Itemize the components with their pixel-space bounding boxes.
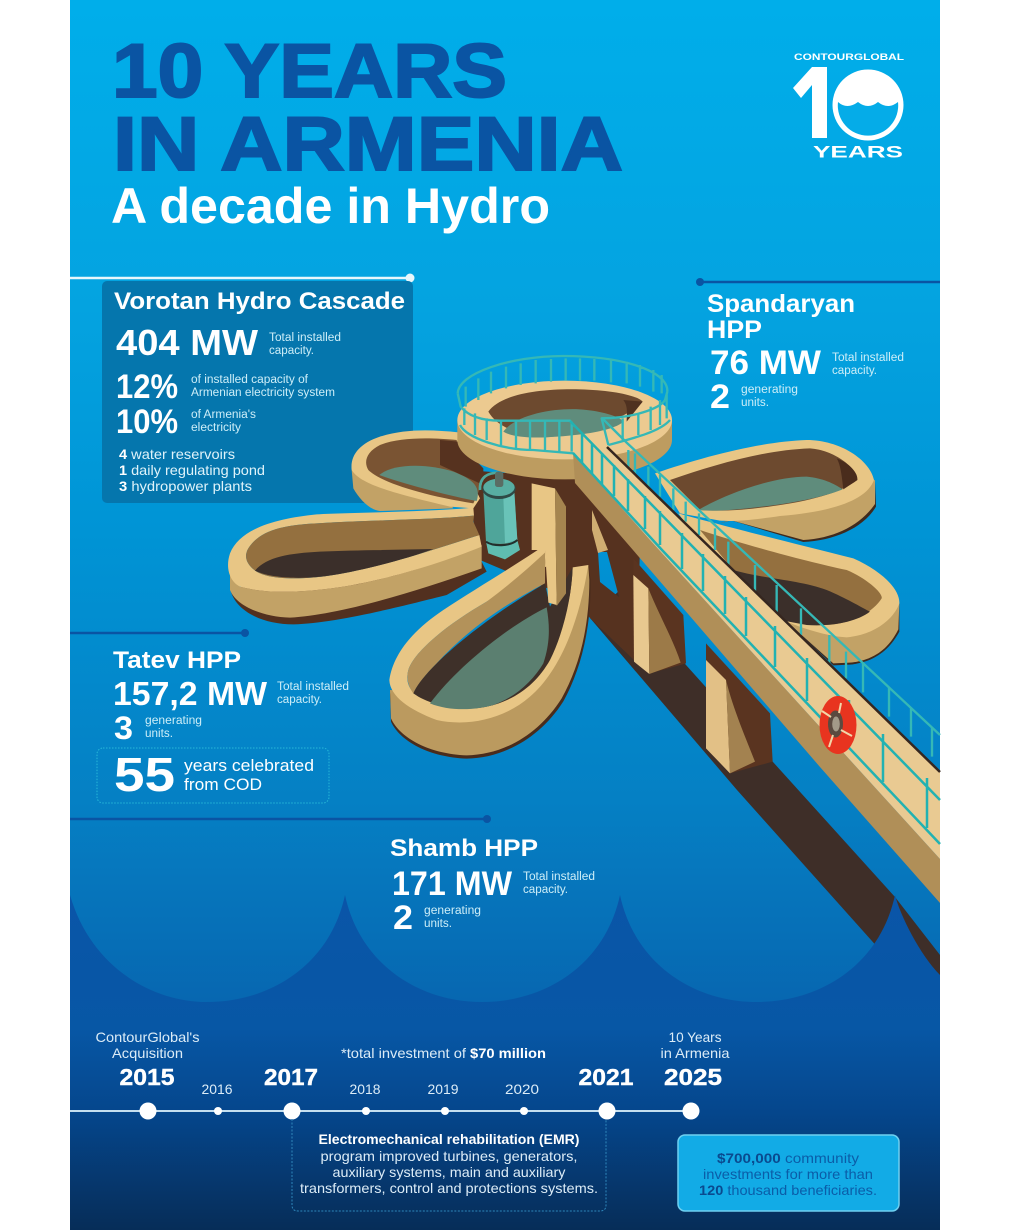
- timeline: 10 Years: [668, 1029, 722, 1045]
- wave scallops: [70, 895, 940, 1230]
- panel: Tatev HPP: Tatev HPP: [113, 647, 241, 674]
- callout: community investments: 120 thousand beneficiaries.: [699, 1182, 877, 1198]
- bridge shadow: [590, 590, 940, 1015]
- panel: Shamb HPP: 2: [393, 899, 413, 937]
- panel: Tatev HPP: 3: [114, 710, 133, 746]
- panel: Vorotan Hydro Cascade: 4 water reservoirs: [119, 446, 235, 462]
- top circular reservoir: [457, 381, 672, 479]
- front railing: [458, 393, 575, 453]
- EMR note: [292, 1119, 606, 1211]
- title: [111, 29, 623, 234]
- timeline: 2018: [350, 1081, 381, 1097]
- far bridge railing: [602, 418, 940, 757]
- EMR note: auxiliary systems, main and auxiliary: [332, 1164, 566, 1180]
- illustration: hydropower reservoir and bridge: [228, 356, 940, 903]
- timeline: ContourGlobal's: [96, 1029, 200, 1045]
- timeline: 2025: [664, 1064, 722, 1090]
- timeline: 2019: [428, 1081, 459, 1097]
- panel: Tatev HPP: from COD: [184, 775, 262, 794]
- panel: Shamb HPP: Total installed: [523, 871, 595, 883]
- panel: Shamb HPP: generating: [424, 905, 481, 917]
- panel: Tatev HPP: [70, 629, 349, 803]
- right upper reservoir: [655, 440, 876, 542]
- bridge deck: [573, 447, 940, 903]
- panel: Vorotan Hydro Cascade: 1 daily regulating pond: [119, 462, 265, 478]
- logo: ContourGlobal 10 years: [793, 52, 905, 162]
- EMR note: transformers, control and protections systems.: [300, 1180, 598, 1196]
- panel: Vorotan Hydro Cascade: of Armenia's: [191, 409, 256, 421]
- near bridge railing: [570, 421, 940, 844]
- icon: red life buoy: [820, 696, 856, 754]
- logo: ContourGlobal 10 years: YEARS: [813, 144, 903, 162]
- bridge pillars: [633, 558, 773, 773]
- panel: Spandaryan HPP: HPP: [707, 316, 762, 344]
- panel: Shamb HPP: units.: [424, 918, 452, 930]
- small tan strut: [592, 510, 608, 553]
- panel: Vorotan Hydro Cascade: 10%: [116, 403, 178, 441]
- panel: Tatev HPP: years celebrated: [184, 756, 314, 775]
- panel: Vorotan Hydro Cascade: 12%: [116, 368, 178, 406]
- upper left reservoir: [351, 430, 483, 511]
- panel: Vorotan Hydro Cascade: of installed capacity of: [191, 374, 309, 386]
- title: IN ARMENIA: [113, 102, 623, 187]
- panel: Spandaryan HPP: [696, 278, 940, 416]
- EMR note: Electromechanical rehabilitation (EMR): [318, 1131, 580, 1147]
- panel: Spandaryan HPP: 2: [710, 378, 730, 416]
- EMR note: program improved turbines, generators,: [320, 1148, 578, 1164]
- timeline: [70, 1029, 730, 1120]
- panel: Spandaryan HPP: units.: [741, 397, 769, 409]
- logo: ContourGlobal 10 years: CONTOURGLOBAL: [794, 52, 905, 62]
- panel: Spandaryan HPP: capacity.: [832, 365, 877, 377]
- panel: Spandaryan HPP: generating: [741, 384, 798, 396]
- panel: Vorotan Hydro Cascade: [70, 274, 414, 503]
- title: 10 YEARS: [112, 29, 507, 114]
- callout: community investments: investments for more than: [703, 1166, 873, 1182]
- callout: community investments: $700,000 community: [717, 1150, 859, 1166]
- panel: Shamb HPP: [70, 815, 595, 937]
- panel: Vorotan Hydro Cascade: capacity.: [269, 345, 314, 357]
- timeline: 2017: [264, 1064, 318, 1090]
- panel: Vorotan Hydro Cascade: electricity: [191, 422, 241, 434]
- timeline: in Armenia: [660, 1045, 730, 1061]
- callout: community investments: [678, 1135, 899, 1211]
- teal surge tank: [480, 472, 520, 559]
- right lower reservoir: [678, 513, 899, 665]
- title: A decade in Hydro: [111, 178, 550, 234]
- panel: Tatev HPP: generating: [145, 715, 202, 727]
- panel: Vorotan Hydro Cascade: Armenian electricity system: [191, 387, 335, 399]
- panel: Tatev HPP: units.: [145, 728, 173, 740]
- panel: Vorotan Hydro Cascade: 3 hydropower plants: [119, 478, 252, 494]
- panel: Tatev HPP: 157,2 MW: [113, 675, 268, 712]
- timeline: 2015: [120, 1064, 175, 1090]
- timeline: 2016: [202, 1081, 233, 1097]
- panel: Shamb HPP: capacity.: [523, 884, 568, 896]
- panel: Shamb HPP: Shamb HPP: [390, 835, 538, 862]
- circle railing: [458, 356, 670, 445]
- panel: Tatev HPP: Total installed: [277, 681, 349, 693]
- timeline: 2020: [505, 1081, 539, 1097]
- panel: Spandaryan HPP: Spandaryan: [707, 290, 855, 318]
- panel: Vorotan Hydro Cascade: Total installed: [269, 332, 341, 344]
- panel: Spandaryan HPP: 76 MW: [710, 344, 822, 382]
- timeline: Acquisition: [112, 1045, 183, 1061]
- panel: Vorotan Hydro Cascade: 404 MW: [116, 322, 258, 363]
- left reservoir: [228, 508, 487, 624]
- timeline: 2021: [578, 1064, 634, 1090]
- panel: Spandaryan HPP: Total installed: [832, 352, 904, 364]
- lower reservoir and dividing wall: [389, 483, 591, 759]
- timeline: *total investment of $70 million: [341, 1045, 546, 1061]
- panel: Vorotan Hydro Cascade: Vorotan Hydro Cascade: [114, 288, 405, 315]
- panel: Shamb HPP: 171 MW: [392, 865, 513, 903]
- panel: Tatev HPP: capacity.: [277, 694, 322, 706]
- panel: Tatev HPP: 55: [114, 749, 175, 802]
- central column: [465, 470, 640, 663]
